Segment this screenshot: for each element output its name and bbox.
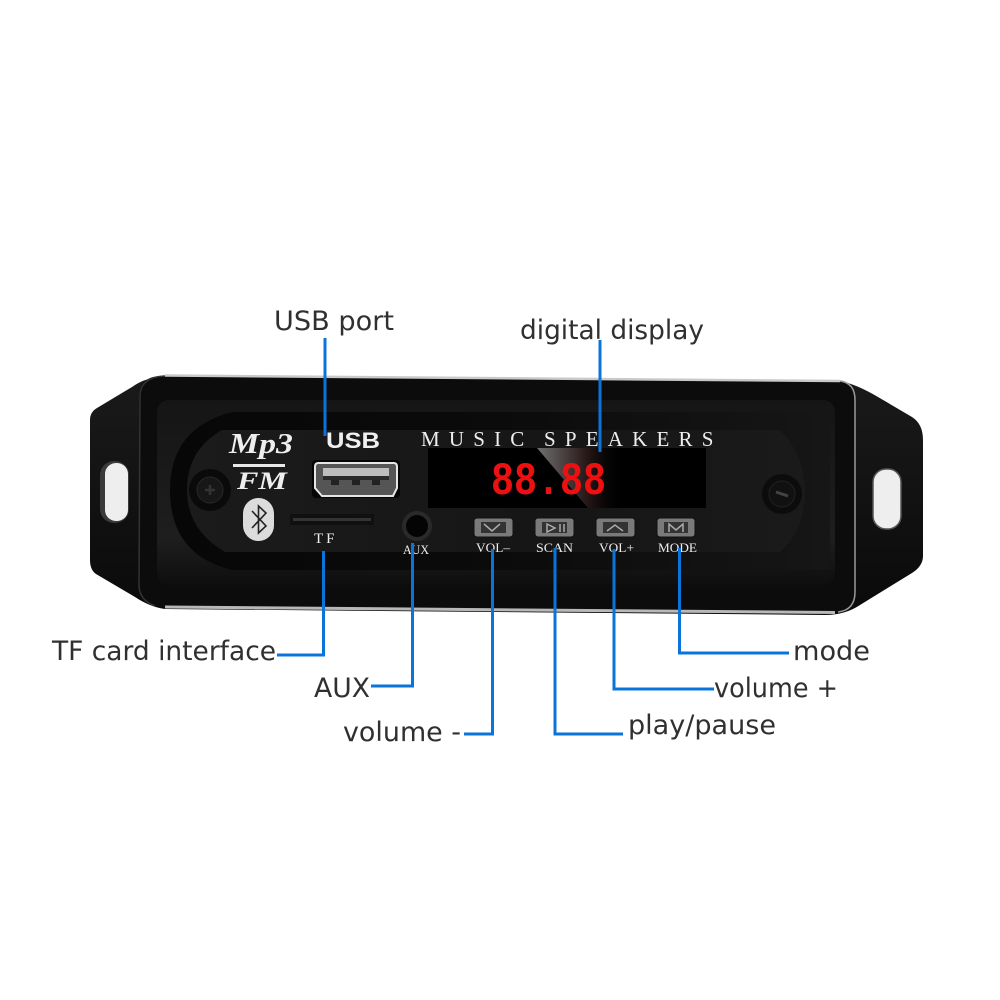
button: mode xyxy=(657,518,697,555)
silver rim xyxy=(165,376,840,381)
label: USB port xyxy=(274,306,394,436)
button: volume plus xyxy=(596,518,635,555)
USB label: USB xyxy=(326,428,380,453)
inner panel xyxy=(157,400,835,585)
button: mode: MODE xyxy=(658,540,697,555)
body frame xyxy=(139,376,855,612)
display glare xyxy=(537,448,625,508)
Mp3 FM logo: Mp3 xyxy=(228,428,293,460)
label: volume minus xyxy=(343,549,492,748)
button: volume minus xyxy=(474,518,513,555)
MUSIC SPEAKERS label: MUSIC SPEAKERS xyxy=(421,427,723,451)
TF card slot xyxy=(290,514,374,547)
Mp3 FM logo xyxy=(228,428,293,495)
front label area xyxy=(170,412,830,570)
AUX jack xyxy=(402,511,432,557)
button: scan xyxy=(535,518,574,555)
label: mode xyxy=(680,548,870,667)
label: digital display: digital display xyxy=(520,315,704,346)
label: volume plus xyxy=(614,549,838,704)
USB port xyxy=(312,460,400,498)
label: volume plus: volume + xyxy=(714,673,838,704)
digital display xyxy=(428,448,706,508)
LED digits: 88.88 xyxy=(491,456,606,508)
mounting flanges xyxy=(90,379,923,615)
right mounting slot xyxy=(873,469,901,529)
label: TF card interface: TF card interface xyxy=(51,636,276,667)
button: volume plus: VOL+ xyxy=(599,540,634,555)
label: volume minus: volume - xyxy=(343,717,461,748)
button: scan: SCAN xyxy=(536,540,574,555)
device: MP3 decoder module xyxy=(90,376,923,615)
right screw xyxy=(762,474,802,514)
label: AUX xyxy=(314,543,412,704)
AUX jack: AUX xyxy=(403,542,430,557)
Mp3 FM logo: FM xyxy=(236,468,288,495)
label: play/pause: play/pause xyxy=(628,710,776,741)
TF card slot: TF xyxy=(314,531,338,547)
label: mode: mode xyxy=(793,636,870,667)
left mounting slot xyxy=(100,461,129,523)
button: volume minus: VOL– xyxy=(476,540,511,555)
label: play/pause xyxy=(555,548,776,741)
label: USB port: USB port xyxy=(274,306,394,337)
left screw xyxy=(189,469,231,511)
label: TF card interface xyxy=(51,551,323,667)
label: AUX: AUX xyxy=(314,673,370,704)
Bluetooth badge xyxy=(243,498,274,541)
